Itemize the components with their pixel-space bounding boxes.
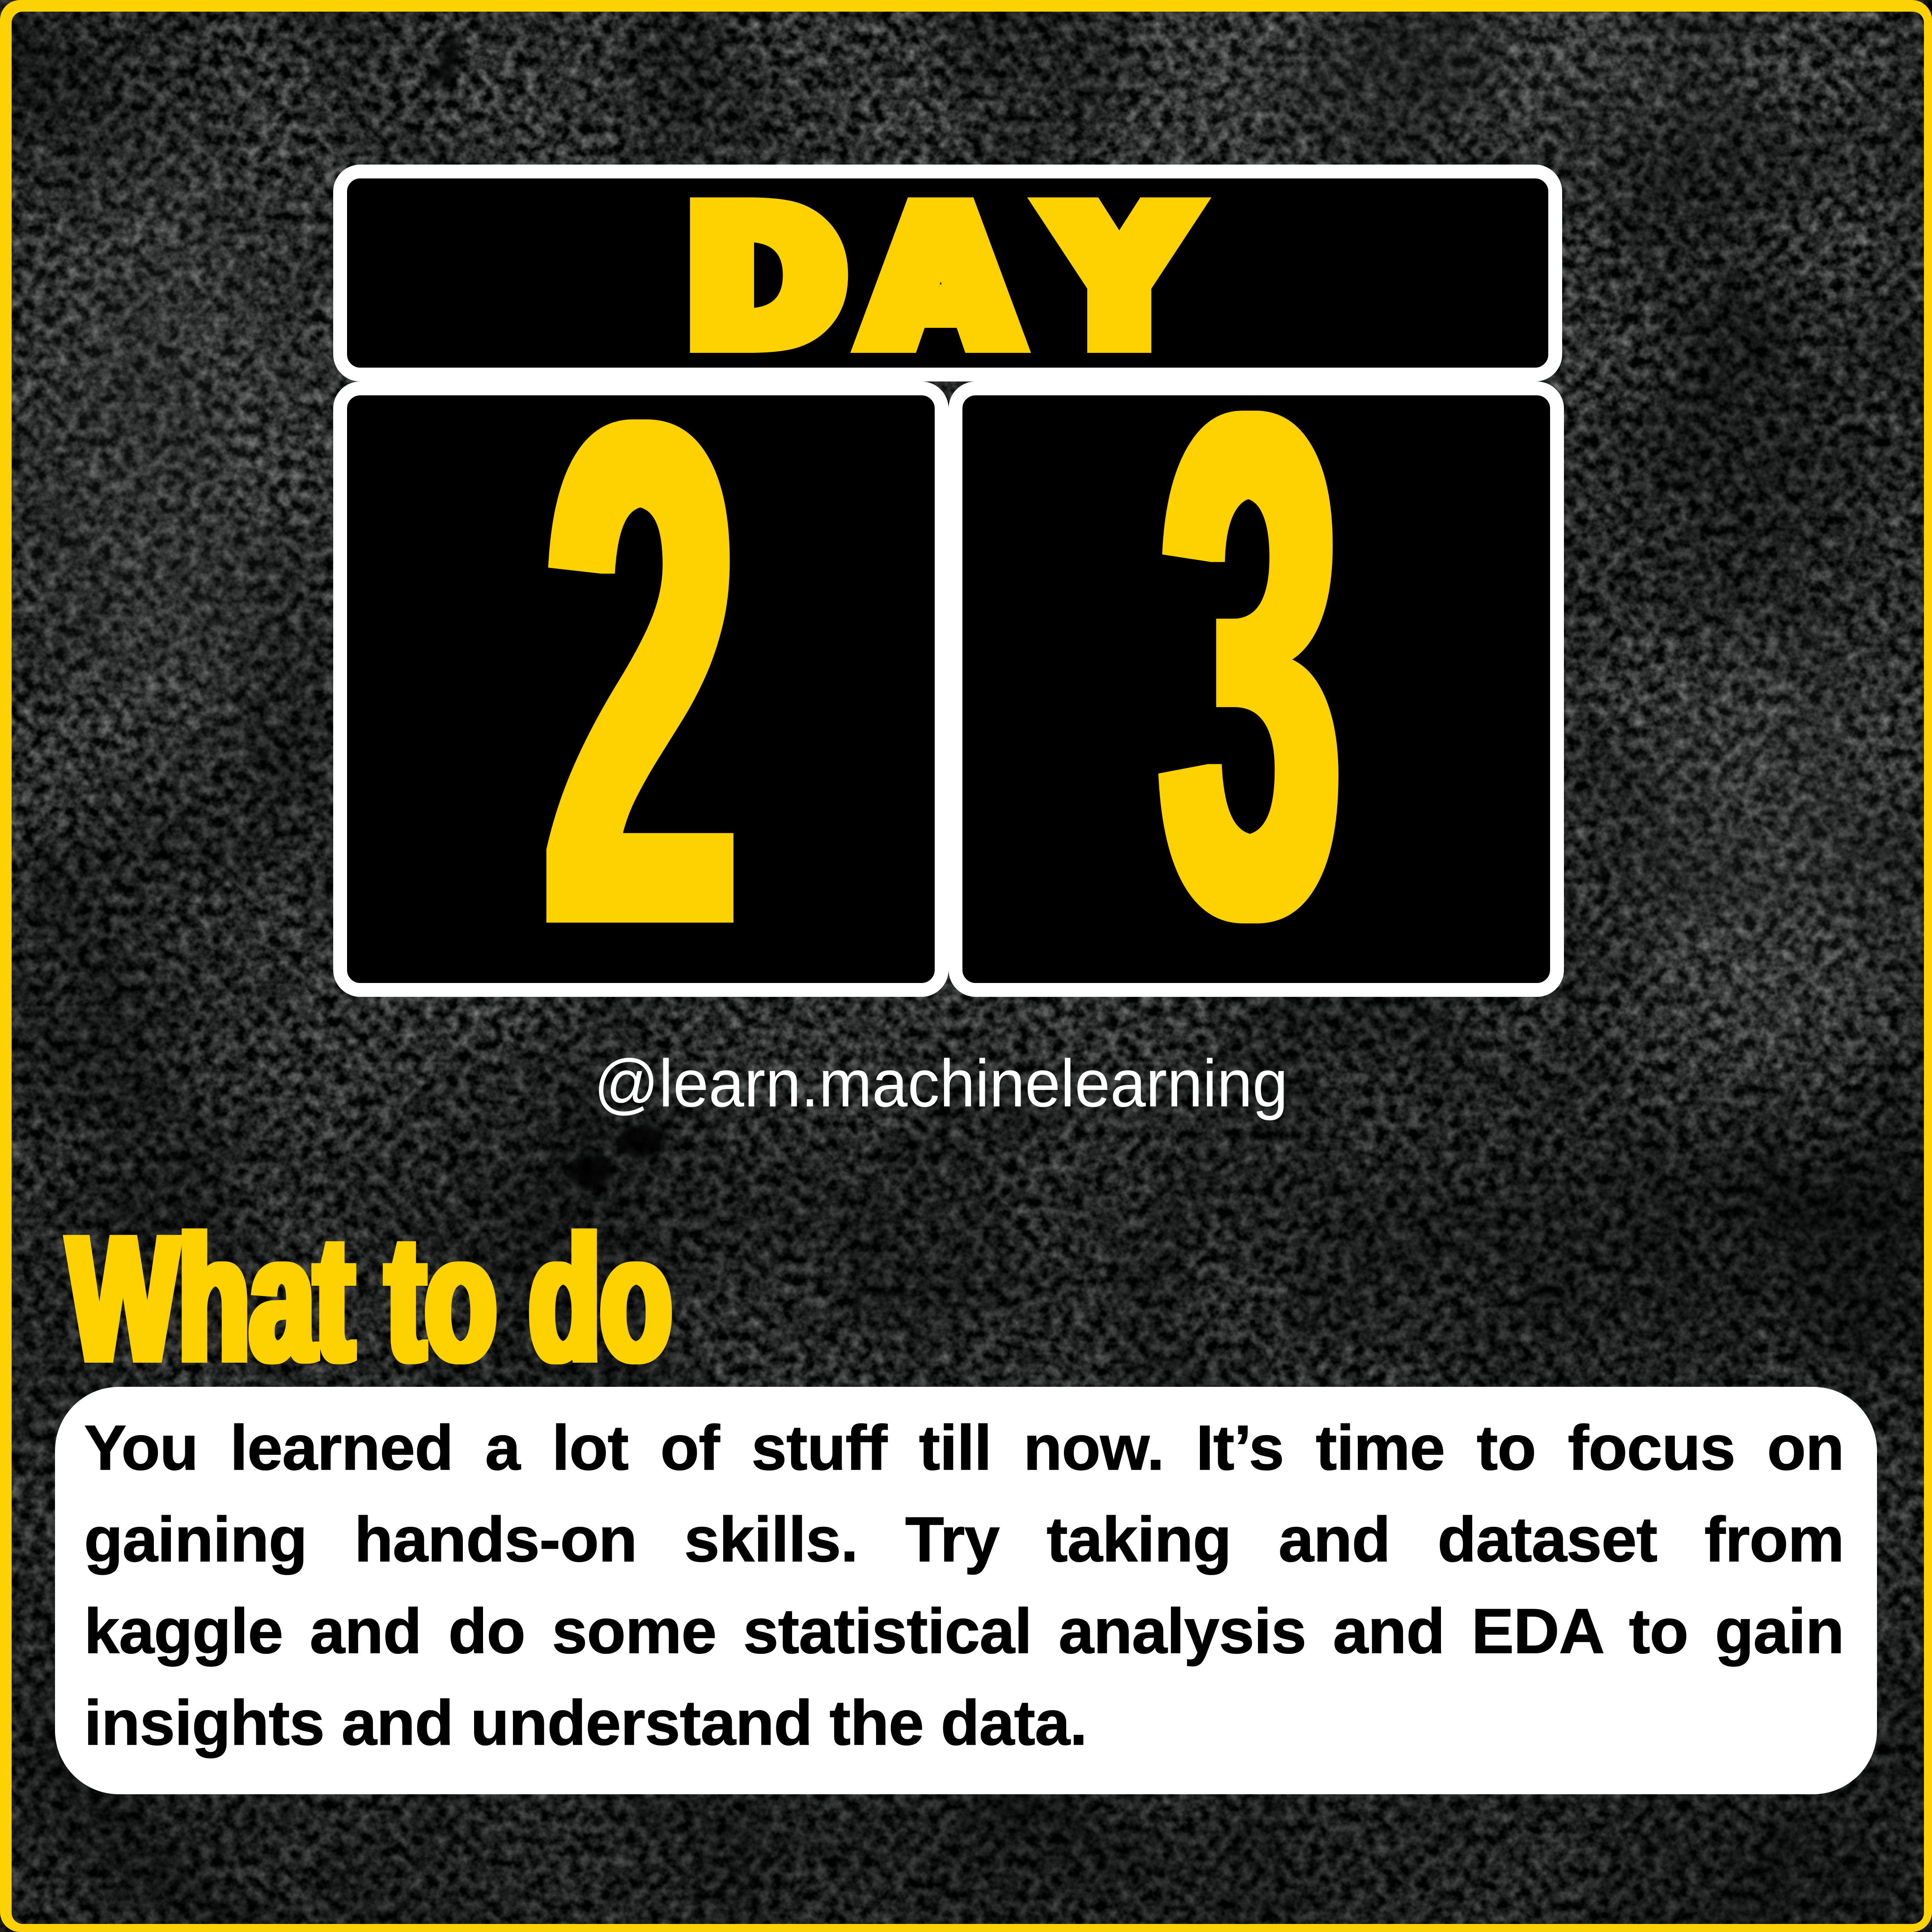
body text block: insights and understand the data. [84, 1687, 1087, 1758]
panel: digit 3: 3 [1160, 269, 1341, 1061]
panel: body text background [55, 1387, 1877, 1794]
handle text: @learn.machinelearning [594, 1046, 1288, 1121]
body text block: kaggle and do some statistical analysis and EDA to gain [84, 1596, 1844, 1667]
panel: DAY header [340, 169, 1555, 389]
heading: DAY: DAY [687, 169, 1190, 389]
body text block: You learned a lot of stuff till now. It’s time to focus on [84, 1412, 1844, 1483]
body text block: gaining hands-on skills. Try taking and dataset from [84, 1504, 1844, 1575]
panel: digit 3 [955, 269, 1557, 1061]
panel: digit 2 [340, 278, 942, 1068]
heading: What to do: What to do [68, 1199, 672, 1397]
body text block [84, 1402, 1844, 1769]
panel: digit 2: 2 [543, 278, 738, 1068]
